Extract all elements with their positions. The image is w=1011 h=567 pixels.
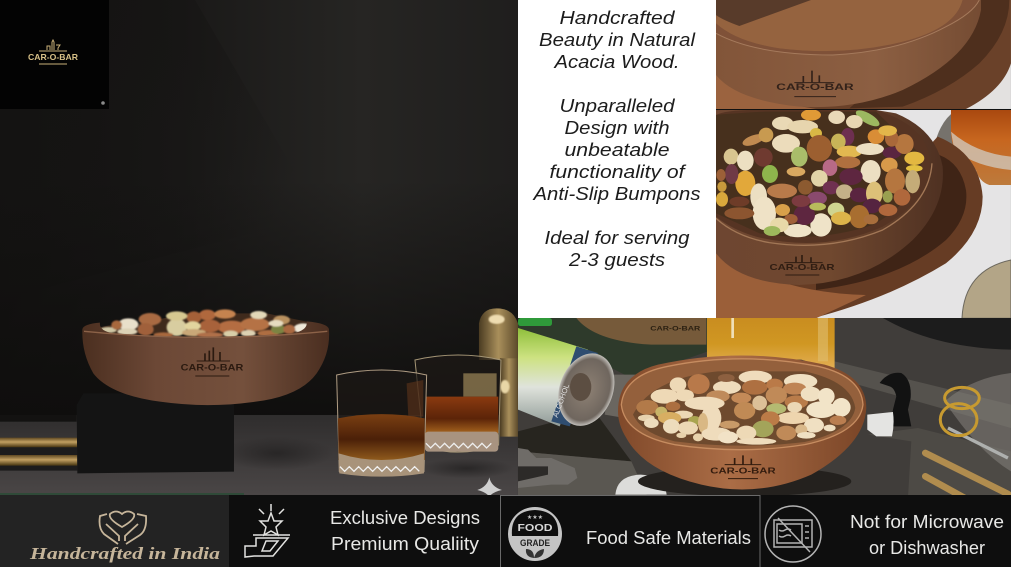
bottom feature bar [0, 493, 1011, 567]
rear bowl [576, 318, 706, 345]
bowl body [716, 110, 943, 285]
coaster behind glass [936, 114, 953, 144]
drink can [518, 328, 614, 426]
logo box [0, 0, 109, 109]
nuts [636, 371, 851, 445]
wood tray [790, 136, 983, 316]
sparkle [101, 101, 105, 105]
engraved logo [181, 347, 244, 376]
panel: features text [518, 0, 716, 318]
script label: Handcrafted in India [29, 544, 221, 563]
panel: features text: unbeatable [564, 139, 670, 160]
engraved logo: CAR-O-BAR [710, 466, 776, 476]
gold rods [0, 438, 77, 471]
panel: features text: Ideal for serving [544, 227, 690, 248]
badge: not for microwave: or Dishwasher [869, 537, 985, 558]
icon: food grade seal [508, 507, 562, 561]
badge: not for microwave: Not for Microwave [850, 511, 1004, 532]
panel: features text: Design with [564, 117, 670, 138]
brand name: CAR-O-BAR [28, 52, 78, 62]
metal coaster [962, 260, 1011, 318]
icon: food grade seal: FOOD [518, 522, 553, 534]
rear bowl: CAR-O-BAR [650, 326, 701, 333]
gold sticks [925, 453, 1008, 498]
icon: food grade seal: GRADE [520, 538, 550, 548]
tray [802, 0, 1011, 109]
logo icon [39, 40, 67, 64]
engraved logo: CAR-O-BAR [776, 82, 854, 92]
rear whisky glass [415, 355, 501, 452]
badge: not for microwave [765, 506, 1004, 562]
engraved logo [710, 455, 776, 479]
black block [76, 415, 234, 474]
photo: bowl on black block, dark scene [0, 0, 518, 497]
chess pieces [867, 373, 911, 436]
badge: food safe materials [500, 496, 760, 567]
corkscrew [518, 448, 577, 488]
panel: features text: Beauty in Natural [539, 29, 696, 50]
beech bowl [618, 355, 866, 496]
nuts [716, 107, 924, 237]
icon: crossed-out microwave [765, 506, 821, 562]
bowl body [716, 0, 981, 107]
badge: exclusive designs [245, 504, 480, 557]
icon: hands holding heart [100, 512, 146, 544]
walnut bowl with nuts [82, 309, 329, 405]
panel: features text: Handcrafted [560, 7, 675, 28]
badge: exclusive designs: Exclusive Designs [330, 507, 480, 528]
gold rings and glass tray [940, 373, 1011, 471]
whisky glass [951, 110, 1011, 185]
green bottle [518, 318, 552, 326]
photo: mixed nuts bowl on tray [716, 107, 1011, 318]
bowl interior [716, 0, 963, 51]
photo: cashew and almond bowl on table [518, 318, 1011, 498]
panel: features text: Unparalleled [560, 95, 675, 116]
engraved logo [776, 71, 854, 97]
panel: features text: Anti-Slip Bumpons [532, 183, 700, 204]
engraved logo: CAR-O-BAR [769, 262, 834, 272]
beer glass [707, 318, 835, 370]
nut bed [716, 112, 923, 237]
engraved logo: CAR-O-BAR [181, 362, 244, 372]
badge: exclusive designs: Premium Qualiity [331, 533, 480, 554]
sparkle decoration [478, 478, 502, 495]
bottle cap [615, 475, 667, 495]
engraved logo [769, 255, 834, 275]
panel: features text: functionality of [550, 161, 687, 182]
photo: bowl close-up with logo [716, 0, 1011, 109]
drink can: ALCOHOL [551, 383, 571, 419]
icon: star on tray [245, 504, 290, 557]
icon: food grade seal: ★★★ [527, 514, 543, 521]
badge: food safe materials: Food Safe Materials [586, 527, 751, 548]
gold shaker [479, 308, 518, 437]
badge: handcrafted in India [0, 495, 229, 567]
front whisky glass [337, 370, 427, 477]
bowl inner wall [716, 110, 891, 243]
panel: features text: 2-3 guests [568, 249, 665, 270]
panel: features text: Acacia Wood. [553, 51, 680, 72]
